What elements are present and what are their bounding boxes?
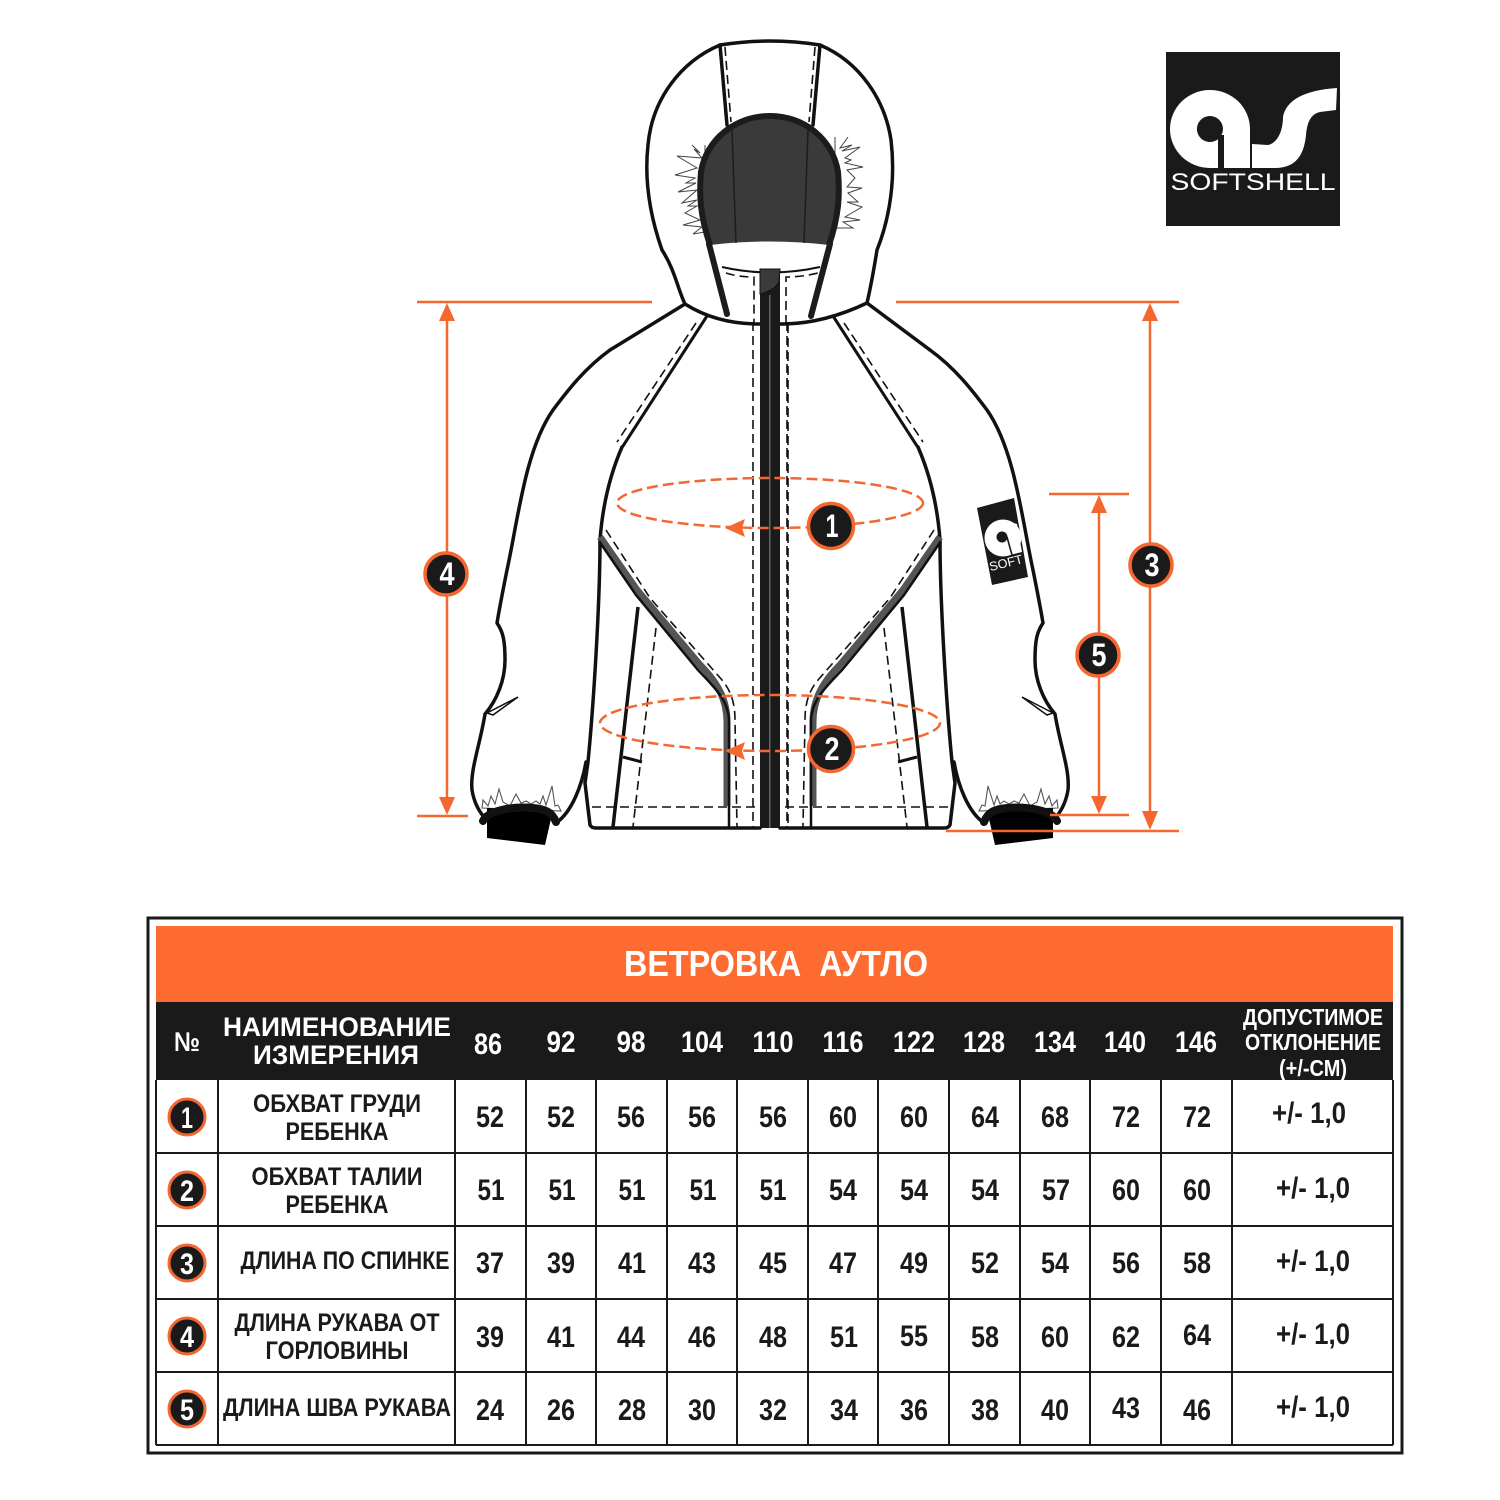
row 2: waist girth: 54 bbox=[900, 1174, 928, 1207]
row 3: back length: 49 bbox=[900, 1247, 928, 1280]
row 3: back length: 3 bbox=[180, 1248, 194, 1281]
row 5: sleeve seam length: 40 bbox=[1041, 1394, 1069, 1427]
row 5: sleeve seam length: 36 bbox=[900, 1394, 928, 1427]
row 1: chest girth: 72 bbox=[1112, 1101, 1140, 1134]
table header row: 134 bbox=[1034, 1026, 1076, 1059]
row 5: sleeve seam length: 43 bbox=[1112, 1392, 1140, 1425]
row 4: sleeve length from neck: 44 bbox=[617, 1321, 645, 1354]
jacket technical drawing bbox=[472, 41, 1068, 845]
row 5: sleeve seam length: 32 bbox=[759, 1394, 787, 1427]
row 5: sleeve seam length: 30 bbox=[688, 1394, 716, 1427]
row 1: chest girth: 64 bbox=[971, 1101, 999, 1134]
row 3: back length: 52 bbox=[971, 1247, 999, 1280]
row 1: chest girth: 60 bbox=[900, 1101, 928, 1134]
row 2: waist girth bbox=[169, 1163, 1350, 1219]
row 4: sleeve length from neck: 64 bbox=[1183, 1319, 1211, 1352]
table header row: 122 bbox=[893, 1026, 935, 1059]
badge 2: 2 bbox=[824, 731, 840, 767]
row 1: chest girth bbox=[169, 1090, 1346, 1146]
row 5: sleeve seam length: +/- 1,0 bbox=[1276, 1391, 1350, 1424]
row 4: sleeve length from neck: ГОРЛОВИНЫ bbox=[266, 1337, 408, 1365]
hood bbox=[647, 41, 893, 324]
row 3: back length: ДЛИНА ПО СПИНКЕ bbox=[240, 1247, 450, 1275]
table header row: ОТКЛОНЕНИЕ bbox=[1245, 1029, 1381, 1055]
row 1: chest girth: РЕБЕНКА bbox=[286, 1118, 388, 1146]
row 5: sleeve seam length: 26 bbox=[547, 1394, 575, 1427]
row 5: sleeve seam length: 34 bbox=[830, 1394, 858, 1427]
title bar: ВЕТРОВКА АУТЛО bbox=[624, 943, 928, 984]
row 4: sleeve length from neck: ДЛИНА РУКАВА ОТ bbox=[234, 1309, 440, 1337]
jacket left half: sleeve, seams, pocket and cuff bbox=[472, 316, 760, 845]
hood shell bbox=[647, 41, 893, 324]
row 1: chest girth: +/- 1,0 bbox=[1272, 1097, 1346, 1130]
table header row: ДОПУСТИМОЕ bbox=[1243, 1004, 1383, 1030]
row 2: waist girth: 51 bbox=[478, 1174, 504, 1207]
row 1: chest girth: ОБХВАТ ГРУДИ bbox=[253, 1090, 421, 1118]
table header row: 86 bbox=[474, 1028, 502, 1061]
badge 2 bbox=[808, 726, 854, 772]
row 4: sleeve length from neck: 51 bbox=[830, 1321, 858, 1354]
sleeve patch: soft logo bbox=[977, 498, 1028, 585]
table header row: 140 bbox=[1104, 1026, 1146, 1059]
row 4: sleeve length from neck: 46 bbox=[688, 1321, 716, 1354]
badge 1: 1 bbox=[826, 508, 838, 544]
badge 1 bbox=[808, 504, 854, 548]
badge 3: 3 bbox=[1144, 547, 1160, 583]
row 2: waist girth: 57 bbox=[1042, 1174, 1070, 1207]
measurement 1: chest girth bbox=[617, 478, 923, 548]
row 2: waist girth: 60 bbox=[1112, 1174, 1140, 1207]
row 4: sleeve length from neck: +/- 1,0 bbox=[1276, 1318, 1350, 1351]
row 1: chest girth: 56 bbox=[759, 1101, 787, 1134]
row 2: waist girth: 51 bbox=[618, 1174, 646, 1207]
sleeve cuff bbox=[482, 786, 561, 845]
row 4: sleeve length from neck bbox=[169, 1309, 1350, 1365]
row 1: chest girth: 68 bbox=[1041, 1101, 1069, 1134]
row 1: chest girth: 56 bbox=[688, 1101, 716, 1134]
row 3: back length: 41 bbox=[618, 1247, 646, 1280]
row 4: sleeve length from neck: 4 bbox=[180, 1321, 194, 1354]
sleeve patch: soft logo: SOFT bbox=[988, 552, 1025, 574]
table header row bbox=[156, 1002, 1393, 1081]
row 3: back length: 37 bbox=[476, 1247, 504, 1280]
row 2: waist girth: +/- 1,0 bbox=[1276, 1172, 1350, 1205]
measurement 4: sleeve length from neck bbox=[417, 302, 652, 816]
row 1: chest girth: 52 bbox=[547, 1101, 575, 1134]
row 1: chest girth: 60 bbox=[829, 1101, 857, 1134]
row 4: sleeve length from neck: 62 bbox=[1112, 1321, 1140, 1354]
badge 5: 5 bbox=[1092, 637, 1106, 673]
logo: softshell bbox=[1166, 52, 1340, 226]
row 1: chest girth: 52 bbox=[476, 1101, 504, 1134]
row 2: waist girth: 51 bbox=[760, 1174, 786, 1207]
row 5: sleeve seam length: 24 bbox=[476, 1394, 504, 1427]
measurement 2: waist girth bbox=[600, 695, 940, 772]
row 4: sleeve length from neck: 48 bbox=[759, 1321, 787, 1354]
row 2: waist girth: 54 bbox=[829, 1174, 857, 1207]
table header row: 98 bbox=[616, 1026, 646, 1059]
row 3: back length: 45 bbox=[759, 1247, 787, 1280]
row 3: back length: 54 bbox=[1041, 1247, 1069, 1280]
table header row: ИЗМЕРЕНИЯ bbox=[253, 1040, 419, 1070]
size table bbox=[148, 918, 1402, 1453]
title bar bbox=[156, 926, 1393, 1003]
badge 3 bbox=[1130, 544, 1172, 586]
row 3: back length: 47 bbox=[829, 1247, 857, 1280]
row 1: chest girth: 1 bbox=[181, 1102, 193, 1135]
badge 4: 4 bbox=[440, 556, 455, 592]
table header row: 128 bbox=[963, 1026, 1005, 1059]
measurement 5: sleeve seam length bbox=[1049, 494, 1129, 815]
row 5: sleeve seam length: 46 bbox=[1183, 1394, 1211, 1427]
row 3: back length: 43 bbox=[688, 1247, 716, 1280]
row 3: back length bbox=[169, 1245, 1350, 1281]
row 2: waist girth: ОБХВАТ ТАЛИИ bbox=[252, 1163, 422, 1191]
badge 5 bbox=[1077, 634, 1119, 676]
row 5: sleeve seam length: 28 bbox=[618, 1394, 646, 1427]
row 1: chest girth: 56 bbox=[617, 1101, 645, 1134]
table header row: 92 bbox=[546, 1026, 576, 1059]
jacket right half mirrored bbox=[780, 316, 1068, 845]
row 4: sleeve length from neck: 60 bbox=[1041, 1321, 1069, 1354]
row 3: back length: +/- 1,0 bbox=[1276, 1245, 1350, 1278]
hood fur trim bbox=[675, 145, 705, 234]
zipper bbox=[760, 269, 788, 828]
row 5: sleeve seam length: ДЛИНА ШВА РУКАВА bbox=[223, 1394, 451, 1422]
table header row: 146 bbox=[1175, 1026, 1217, 1059]
row 3: back length: 58 bbox=[1183, 1247, 1211, 1280]
table header row: (+/-СМ) bbox=[1279, 1055, 1347, 1081]
row 4: sleeve length from neck: 41 bbox=[547, 1321, 575, 1354]
row 5: sleeve seam length: 5 bbox=[180, 1394, 194, 1427]
row 5: sleeve seam length: 38 bbox=[971, 1394, 999, 1427]
row 2: waist girth: 51 bbox=[690, 1174, 716, 1207]
row 2: waist girth: РЕБЕНКА bbox=[286, 1191, 388, 1219]
row 4: sleeve length from neck: 58 bbox=[971, 1321, 999, 1354]
table header row: НАИМЕНОВАНИЕ bbox=[223, 1012, 451, 1042]
logo: softshell: SOFTSHELL bbox=[1170, 169, 1336, 196]
table header row: 116 bbox=[822, 1026, 864, 1059]
badge 4 bbox=[425, 553, 467, 595]
table header row: № bbox=[174, 1027, 200, 1057]
row 2: waist girth: 51 bbox=[548, 1174, 576, 1207]
row 1: chest girth: 72 bbox=[1183, 1101, 1211, 1134]
row 3: back length: 39 bbox=[547, 1247, 575, 1280]
row 2: waist girth: 54 bbox=[971, 1174, 999, 1207]
row 4: sleeve length from neck: 55 bbox=[900, 1320, 928, 1353]
table header row: 104 bbox=[681, 1026, 723, 1059]
table grid bbox=[156, 1080, 1393, 1445]
hood inner opening bbox=[700, 116, 839, 245]
row 4: sleeve length from neck: 39 bbox=[476, 1321, 504, 1354]
table header row: 110 bbox=[752, 1026, 794, 1059]
row 2: waist girth: 2 bbox=[180, 1175, 194, 1208]
row 2: waist girth: 60 bbox=[1183, 1174, 1211, 1207]
shoulder seams to hood bbox=[610, 303, 930, 350]
row 3: back length: 56 bbox=[1112, 1247, 1140, 1280]
table frame bbox=[148, 918, 1402, 1453]
measurement 3: back length bbox=[896, 302, 1179, 831]
row 5: sleeve seam length bbox=[169, 1391, 1350, 1427]
